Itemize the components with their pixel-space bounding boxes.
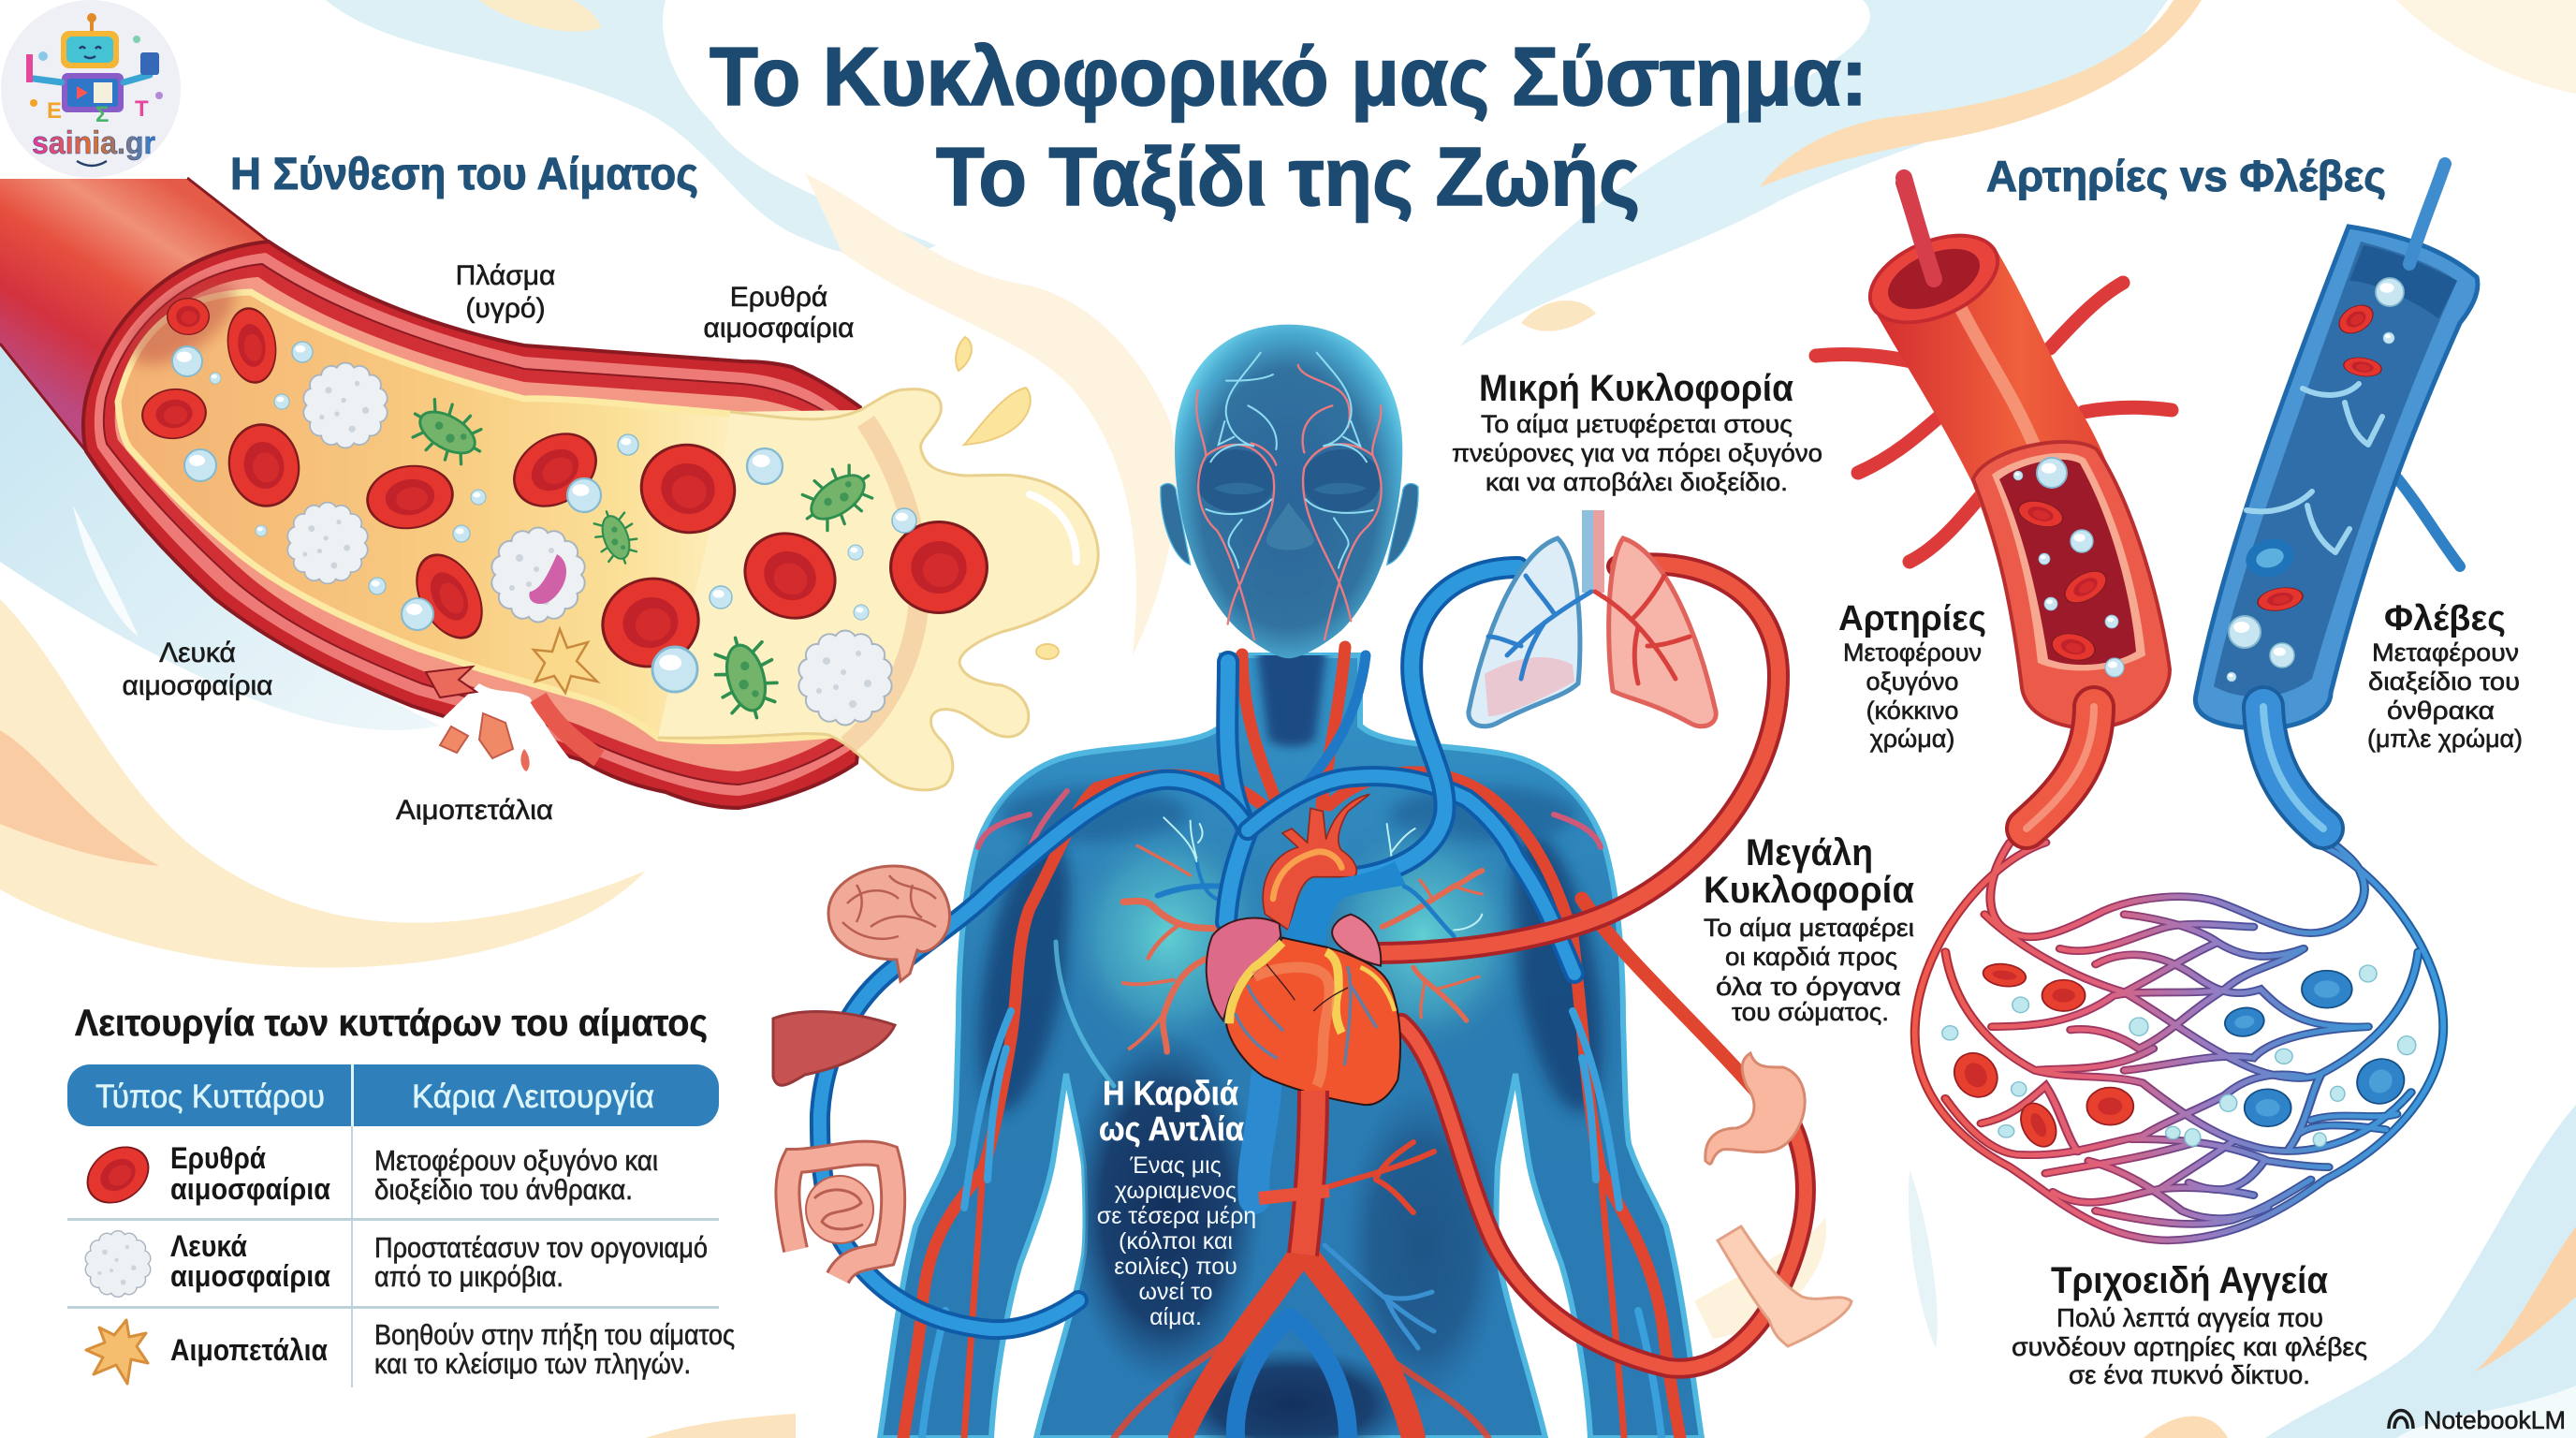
body silhouette	[880, 646, 1702, 1438]
heart pump text: σε τέσερα μέρη	[1097, 1203, 1256, 1229]
logo: Τ	[135, 96, 149, 122]
title	[710, 30, 1867, 223]
label: systemic circulation	[1704, 832, 1914, 1026]
row: white blood cells: Προστατέασυν τον οργονιαμό	[374, 1231, 708, 1264]
head with face and vessels	[1161, 325, 1418, 658]
vein illustration	[2195, 164, 2478, 728]
label: capillaries: συνδέουν αρτηρίες και φλέβες	[2012, 1332, 2367, 1361]
vessel lumen	[118, 292, 868, 741]
row: platelets: Βοηθούν στην πήξη του αίματος	[374, 1318, 735, 1351]
exit vessels	[2027, 707, 2323, 829]
label: arteries	[1838, 599, 1986, 753]
capillary bubbles	[1942, 965, 2416, 1147]
platelet	[534, 629, 597, 693]
heading: blood composition: Η Σύνθεση του Αίματος	[230, 150, 698, 199]
label: plasma: Πλάσμα	[456, 260, 555, 291]
artery illustration	[1816, 178, 2172, 728]
row: white blood cells: Λευκά	[170, 1229, 247, 1263]
heart	[1207, 794, 1406, 1105]
label: capillaries: Τριχοειδή Αγγεία	[2051, 1260, 2328, 1301]
heart pump text: εοιλίες) που	[1114, 1254, 1237, 1280]
veins in body	[922, 655, 1661, 1438]
label: arteries: (κόκκινο	[1866, 697, 1958, 725]
row: red blood cells: Ερυθρά	[170, 1141, 266, 1175]
label: systemic circulation: οι καρδιά προς	[1725, 943, 1897, 971]
pulmonary circulation loop	[1348, 564, 1778, 953]
heart pump text: Η Καρδιά	[1103, 1074, 1238, 1112]
label: pulmonary circulation: Μικρή Κυκλοφορία	[1479, 368, 1793, 409]
aorta	[1259, 1091, 1329, 1255]
wall tear and fragments	[426, 667, 599, 771]
heart pump text: ως Αντλία	[1099, 1109, 1244, 1148]
label: plasma: (υγρό)	[465, 293, 546, 324]
row: red blood cells: διοξείδιο του άνθρακα.	[374, 1173, 633, 1206]
heart pump text: αίμα.	[1149, 1304, 1202, 1330]
plasma bubbles	[172, 342, 916, 692]
label: systemic circulation: Μεγάλη	[1746, 832, 1873, 873]
bacteria	[402, 390, 883, 725]
panel: blood cell function table	[67, 1003, 735, 1387]
label: veins	[2367, 599, 2523, 753]
label: platelets: Αιμοπετάλια	[396, 795, 553, 826]
title: Το Ταξίδι της Ζωής	[936, 130, 1640, 223]
heading: arteries vs veins: Αρτηρίες vs Φλέβες	[1986, 152, 2386, 200]
label: pulmonary circulation: Το αίμα μετυφέρεται στους	[1481, 410, 1793, 438]
label: red cells: Ερυθρά	[730, 282, 827, 313]
blood vessel illustration	[0, 178, 1098, 808]
lungs	[1469, 510, 1716, 726]
title: Το Κυκλοφορικό μας Σύστημα:	[710, 30, 1867, 123]
organ: intestines	[787, 1153, 893, 1278]
label: capillaries: σε ένα πυκνό δίκτυο.	[2069, 1360, 2310, 1389]
logo	[0, 0, 187, 179]
heart pump text: ωνεί το	[1138, 1279, 1213, 1305]
row: red blood cells	[76, 1135, 658, 1215]
chest vessel branches	[1123, 817, 1482, 1051]
label: systemic circulation: όλα το όργανα	[1716, 973, 1901, 1001]
capillary red cells	[1948, 961, 2133, 1151]
row: red blood cells: αιμοσφαίρια	[170, 1172, 330, 1206]
label: veins: Φλέβες	[2384, 599, 2506, 638]
label: capillaries: Πολύ λεπτά αγγεία που	[2056, 1303, 2323, 1332]
label: pulmonary circulation: πνεύρονες για να πόρει οξυγόνο	[1452, 439, 1822, 467]
logo: Σ	[95, 102, 109, 127]
table heading: Λειτουργία των κυττάρων του αίματος	[75, 1003, 708, 1044]
heart pump text: (κόλποι και	[1119, 1228, 1233, 1255]
table header	[67, 1064, 719, 1126]
capillary network	[1915, 843, 2443, 1240]
heart pump text	[1097, 1074, 1256, 1330]
row: white blood cells: αιμοσφαίρια	[170, 1259, 330, 1293]
logo: Ε	[47, 98, 62, 124]
label: pulmonary circulation	[1452, 368, 1822, 496]
label: systemic circulation: Το αίμα μεταφέρει	[1704, 914, 1914, 942]
label: systemic circulation: Κυκλοφορία	[1704, 870, 1914, 911]
red blood cells	[139, 298, 988, 679]
row: red blood cells: Μετοφέρουν οξυγόνο και	[374, 1144, 658, 1177]
organ: leg and foot	[1718, 1226, 1852, 1346]
label: veins: διαξείδιο του	[2368, 668, 2520, 696]
heart pump text: χωριαμενος	[1115, 1178, 1237, 1204]
label: capillaries	[2012, 1260, 2367, 1389]
label: red cells: αιμοσφαίρια	[703, 313, 855, 344]
label: systemic circulation: του σώματος.	[1732, 998, 1889, 1026]
white blood cells	[287, 363, 892, 725]
label: veins: Μεταφέρουν	[2372, 638, 2519, 667]
plasma overflow	[658, 337, 1098, 790]
logo: sainia.gr	[32, 125, 155, 161]
row: platelets	[86, 1318, 735, 1384]
label: pulmonary circulation: και να αποβάλει διοξείδιο.	[1486, 468, 1788, 496]
label: arteries: Αρτηρίες	[1838, 599, 1986, 638]
row: platelets: και το κλείσιμο των πληγών.	[374, 1347, 691, 1380]
capillary blue cells	[2221, 971, 2409, 1126]
panel: human circulatory figure	[773, 325, 1852, 1438]
label: arteries: οξυγόνο	[1866, 668, 1958, 696]
row: white blood cells: από το μικρόβια.	[374, 1260, 564, 1293]
row: white blood cells	[85, 1229, 708, 1297]
organ: liver	[773, 1012, 895, 1085]
NotebookLM watermark: NotebookLM	[2423, 1406, 2566, 1434]
heart pump text: Ένας μις	[1129, 1152, 1222, 1179]
label: white cells: Λευκά	[159, 638, 236, 668]
arteries in body	[903, 647, 1760, 1438]
table header: Κάρια Λειτουργία	[412, 1078, 654, 1115]
panel: arteries vs veins	[1816, 152, 2523, 1389]
table header: Τύπος Κυττάρου	[95, 1078, 325, 1115]
label: arteries: Μετοφέρουν	[1843, 638, 1982, 667]
label: veins: (μπλε χρώμα)	[2367, 725, 2523, 753]
panel: blood composition	[0, 150, 1098, 826]
row: platelets: Αιμοπετάλια	[170, 1333, 328, 1367]
systemic circulation loop	[820, 662, 1806, 1369]
label: veins: όνθρακα	[2387, 697, 2495, 725]
organ: brain	[828, 866, 950, 981]
label: arteries: χρώμα)	[1870, 725, 1954, 753]
label: white cells: αιμοσφαίρια	[122, 670, 273, 701]
organ: stomach	[1705, 1053, 1805, 1164]
